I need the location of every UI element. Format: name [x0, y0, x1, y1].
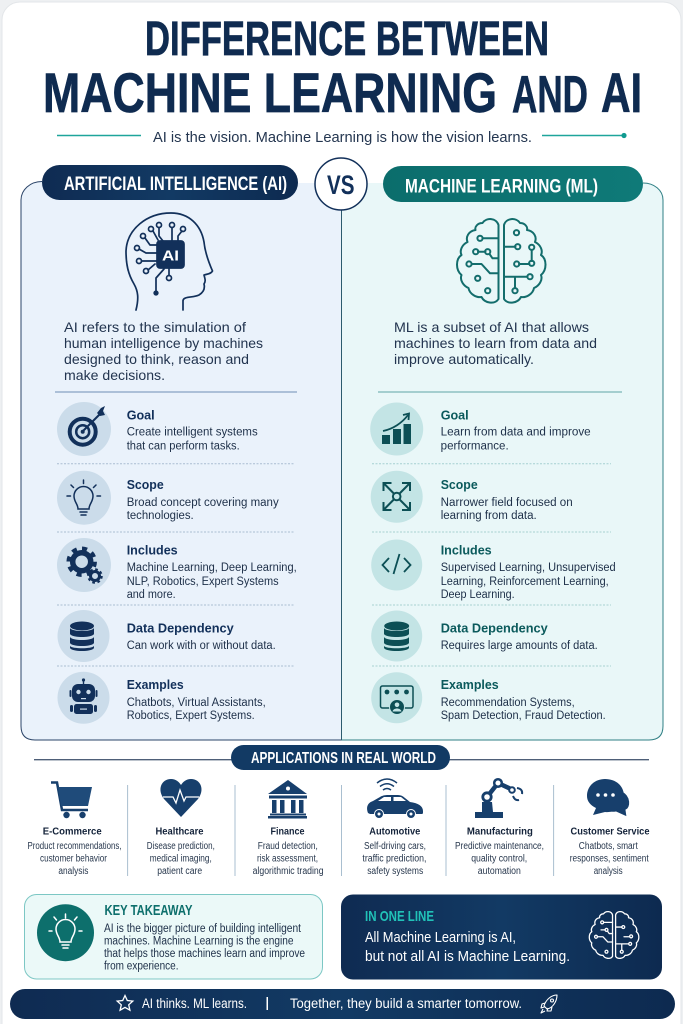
callout: in one line: but not all AI is Machine Learning. — [365, 949, 570, 965]
title: AI — [601, 61, 642, 124]
heading: artificial intelligence — [42, 165, 298, 200]
row: AI includes: and more. — [127, 589, 176, 601]
panel: artificial intelligence — [21, 165, 342, 740]
icon: chat bubbles — [587, 779, 630, 817]
application: manufacturing: Predictive maintenance, — [455, 841, 544, 852]
callout: in one line — [341, 894, 662, 980]
text: AI definition: make decisions. — [64, 367, 165, 383]
row: ML examples: Examples — [441, 677, 499, 692]
row: AI goal: Goal — [127, 408, 155, 422]
title: MACHINE LEARNING — [43, 61, 497, 124]
row: AI data dependency: Can work with or without data. — [127, 640, 276, 652]
subtitle: AI is the vision. Machine Learning is how the vision learns. — [153, 129, 532, 146]
text: ML definition: machines to learn from data and — [394, 335, 597, 351]
text: ML definition: improve automatically. — [394, 351, 534, 367]
icon: white brain — [589, 912, 639, 958]
application: manufacturing: Manufacturing — [467, 826, 533, 838]
footer banner — [10, 989, 675, 1019]
icon: gears — [57, 538, 111, 592]
icon: AI head — [126, 213, 212, 310]
application: finance — [253, 780, 324, 877]
panel: machine learning — [342, 166, 663, 740]
icon: database — [58, 610, 110, 662]
title: AND — [512, 66, 588, 124]
row: ML goal — [441, 408, 591, 452]
application: finance: algorithmic trading — [253, 866, 324, 877]
application: manufacturing: automation — [478, 866, 521, 877]
row: AI includes: Includes — [127, 543, 178, 558]
row: AI includes: Machine Learning, Deep Learning, — [127, 562, 297, 574]
row: ML goal: Goal — [441, 408, 469, 422]
icon: star — [117, 996, 133, 1010]
row: ML data dependency: Data Dependency — [441, 621, 548, 636]
application: healthcare: Disease prediction, — [147, 841, 215, 852]
application: finance: Finance — [270, 826, 305, 838]
callout: key takeaway: from experience. — [104, 960, 178, 972]
icon: shopping cart — [51, 782, 92, 818]
application: automotive: Automotive — [369, 826, 420, 838]
row: AI scope — [127, 477, 279, 522]
application: healthcare: Healthcare — [156, 826, 204, 838]
row: AI scope: technologies. — [127, 510, 194, 522]
row: ML scope: Narrower field focused on — [441, 497, 573, 509]
row: ML goal: performance. — [441, 440, 509, 452]
row: AI goal: that can perform tasks. — [127, 440, 240, 452]
text: ML definition: ML is a subset of AI that allows — [394, 319, 589, 335]
subtitle — [57, 129, 627, 146]
icon: growth chart — [370, 402, 423, 456]
callout: key takeaway — [24, 894, 322, 979]
footer banner: Together, they build a smarter tomorrow. — [290, 996, 522, 1011]
text: AI definition: designed to think, reason and — [64, 351, 249, 367]
callout: key takeaway: AI is the bigger picture of building intelligent — [104, 923, 302, 935]
application: automotive: Self-driving cars, — [364, 841, 426, 852]
text: ML definition — [394, 319, 597, 367]
application: finance: risk assessment, — [257, 854, 318, 864]
application: customer service: responses, sentiment — [570, 854, 649, 864]
application: e-commerce: analysis — [58, 866, 88, 877]
icon: robot — [58, 672, 110, 724]
application: customer service: analysis — [594, 866, 623, 877]
row: ML data dependency: Requires large amounts of data. — [441, 640, 598, 652]
row: AI data dependency: Data Dependency — [127, 621, 234, 636]
application: e-commerce — [28, 782, 122, 877]
application: customer service — [570, 779, 650, 877]
row: AI scope: Broad concept covering many — [127, 497, 279, 509]
application: automotive: traffic prediction, — [362, 854, 426, 864]
application: e-commerce: customer behavior — [40, 854, 108, 864]
heading: applications in real world — [34, 745, 649, 770]
row: AI goal: Create intelligent systems — [127, 427, 258, 439]
VS badge — [315, 158, 367, 210]
row: ML includes: Deep Learning. — [441, 589, 515, 601]
row: ML examples — [441, 677, 606, 722]
application: healthcare: medical imaging, — [150, 854, 212, 864]
icon: robot arm — [475, 779, 522, 818]
title — [43, 13, 642, 124]
icon: connected car — [367, 779, 423, 818]
icon: rated user screen — [371, 672, 422, 723]
row: ML includes: Learning, Reinforcement Learning, — [441, 576, 609, 588]
callout: key takeaway: that helps those machines learn and improve — [104, 948, 305, 960]
application: automotive — [362, 779, 426, 877]
callout: in one line: IN ONE LINE — [365, 908, 434, 925]
application: healthcare: patient care — [157, 866, 203, 877]
icon: rocket — [541, 995, 557, 1013]
text: AI definition — [64, 319, 263, 383]
text: AI definition: AI refers to the simulation of — [64, 319, 246, 335]
row: ML scope — [441, 477, 573, 522]
VS badge: VS — [327, 170, 354, 200]
application: customer service: Chatbots, smart — [579, 841, 638, 852]
row: ML examples: Spam Detection, Fraud Detection. — [441, 710, 606, 722]
application: e-commerce: Product recommendations, — [28, 841, 122, 852]
icon: target — [57, 402, 111, 456]
application: finance: Fraud detection, — [258, 841, 318, 852]
heading: machine learning — [383, 166, 643, 202]
heading: applications in real world: APPLICATIONS IN REAL WORLD — [251, 750, 436, 767]
icon: brain — [457, 219, 546, 303]
icon: bank building — [268, 780, 307, 818]
icon: takeaway bulb — [37, 904, 94, 961]
heading: machine learning: MACHINE LEARNING (ML) — [405, 176, 598, 198]
application: automotive: safety systems — [367, 866, 423, 877]
row: AI includes: NLP, Robotics, Expert Systems — [127, 576, 279, 588]
heading: artificial intelligence: ARTIFICIAL INTELLIGENCE (AI) — [64, 174, 287, 195]
row: ML includes: Supervised Learning, Unsupervised — [441, 562, 616, 574]
row: ML scope: Scope — [441, 477, 478, 492]
row: ML data dependency — [441, 621, 598, 652]
icon label: AI chip: AI — [162, 248, 179, 264]
row: ML includes: Includes — [441, 543, 492, 558]
application: manufacturing: quality control, — [471, 854, 527, 864]
icon: light bulb — [57, 471, 111, 525]
row: AI goal — [127, 408, 258, 452]
icon: code brackets — [371, 540, 422, 590]
row: ML scope: learning from data. — [441, 510, 537, 522]
callout: key takeaway: machines. Machine Learning is the engine — [104, 936, 294, 948]
callout: key takeaway: KEY TAKEAWAY — [104, 902, 192, 919]
row: AI data dependency — [127, 621, 276, 652]
application: customer service: Customer Service — [570, 826, 650, 838]
row: AI examples: Robotics, Expert Systems. — [127, 710, 255, 722]
row: AI includes — [127, 543, 297, 601]
application: manufacturing — [455, 779, 544, 877]
text: AI definition: human intelligence by machines — [64, 335, 263, 351]
application: e-commerce: E-Commerce — [43, 826, 102, 838]
row: AI examples: Chatbots, Virtual Assistants, — [127, 697, 266, 709]
icon: heart with pulse — [160, 779, 202, 817]
application: healthcare — [147, 779, 215, 877]
footer banner: AI thinks. ML learns. — [142, 996, 247, 1011]
row: ML goal: Learn from data and improve — [441, 427, 591, 439]
row: ML examples: Recommendation Systems, — [441, 697, 575, 709]
icon: data cylinder — [371, 610, 422, 662]
row: ML includes — [441, 543, 616, 601]
row: AI examples — [127, 677, 266, 722]
row: AI examples: Examples — [127, 677, 184, 692]
icon: expanding arrows — [371, 471, 423, 523]
callout: in one line: All Machine Learning is AI, — [365, 930, 516, 946]
row: AI scope: Scope — [127, 477, 164, 492]
